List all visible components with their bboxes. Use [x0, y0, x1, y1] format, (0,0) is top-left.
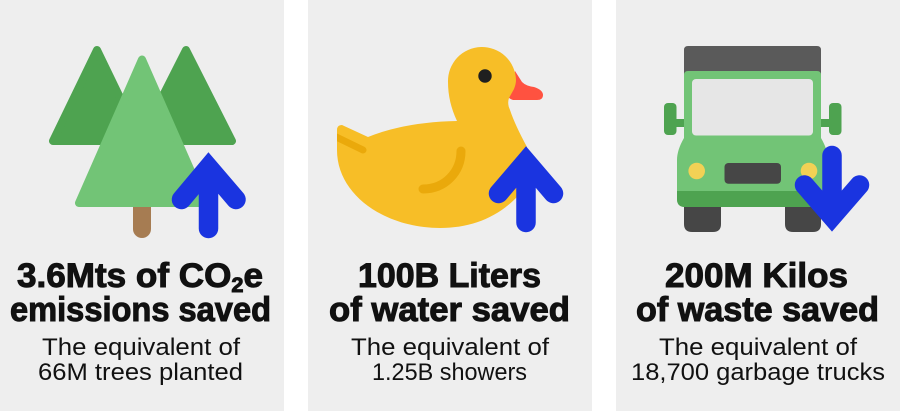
text: showers equivalent: The equivalent of — [351, 334, 549, 361]
heading: water saved — [329, 257, 570, 329]
panel: trees / CO2 — [0, 0, 284, 411]
heading: waste saved: of waste saved — [636, 291, 879, 329]
heading: CO2 saved: emissions saved — [10, 291, 271, 329]
text: trees equivalent: The equivalent of — [42, 334, 240, 361]
heading: CO2 saved — [10, 257, 271, 329]
text: showers equivalent: 1.25B showers — [372, 359, 527, 386]
icon: blue up arrow — [182, 167, 236, 228]
icon: blue up arrow — [498, 161, 554, 222]
heading: CO2 saved: e — [243, 257, 263, 295]
text: garbage trucks equivalent — [631, 334, 885, 386]
text: showers equivalent — [351, 334, 549, 386]
heading: water saved: 100B Liters — [358, 257, 541, 295]
heading: water saved: of water saved — [329, 291, 570, 329]
heading: waste saved — [636, 257, 879, 329]
icon: rubber duck — [330, 47, 543, 228]
panel: truck / waste — [616, 0, 900, 411]
text: trees equivalent — [38, 334, 243, 386]
heading: CO2 saved: 2 — [231, 274, 243, 297]
heading: CO2 saved: 3.6Mts of CO — [17, 257, 225, 295]
text: garbage trucks equivalent: The equivalent of — [659, 334, 857, 361]
heading: waste saved: 200M Kilos — [665, 257, 848, 295]
icon: trees — [53, 50, 232, 238]
panel: duck / water — [308, 0, 592, 411]
text: garbage trucks equivalent: 18,700 garbage trucks — [631, 359, 885, 386]
text: trees equivalent: 66M trees planted — [38, 359, 243, 386]
icon: garbage truck — [664, 46, 842, 232]
icon: blue down arrow — [804, 156, 860, 217]
